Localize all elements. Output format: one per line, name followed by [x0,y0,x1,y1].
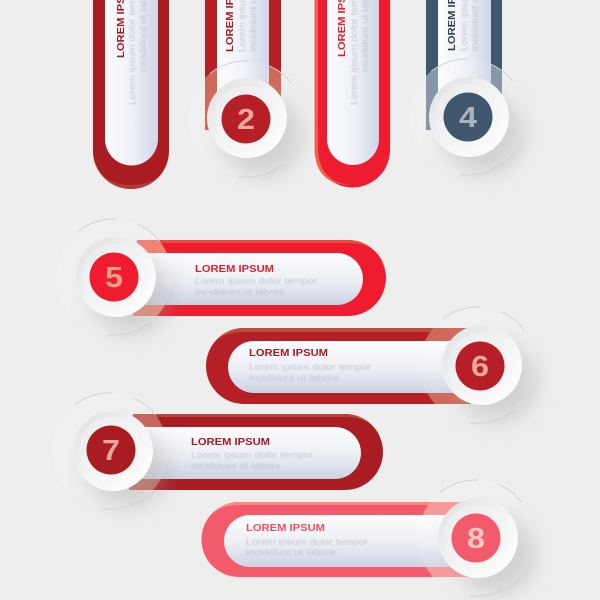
step 7 disc inner [79,417,145,483]
step 7 shadow [87,427,167,507]
step 5 body text [195,276,317,298]
panel: step 6 [206,307,536,423]
step 6 halo arcs [420,307,536,423]
step 5 shadow [90,253,170,333]
step 2 disc [207,78,287,158]
step 6 disc inner [448,333,514,399]
panel: step 4 [409,0,525,175]
step 2 inner card [217,0,269,120]
panel: step 5 [56,219,386,335]
panel: step 2 [188,0,304,177]
step 8 band [202,502,472,577]
step 8 heading: LOREM IPSUM [246,522,325,534]
step 4 body text [459,0,481,51]
step 8 shadow [454,514,534,594]
step 8 halo tint [422,505,468,577]
step 6 body text: incididunt ut labore [249,373,339,384]
step 6 heading: LOREM IPSUM [249,347,328,359]
step 6 band edge [206,328,472,366]
step 3 band [315,0,390,188]
step 8 halo arcs [418,480,534,596]
step 2 halo tint [205,66,281,130]
step 6 band [206,328,476,404]
step 5 halo arcs [56,219,172,335]
step 6 body text [249,362,371,384]
step 6 number: 6 [471,351,489,383]
step 6 number badge [456,342,504,390]
step 7 heading: LOREM IPSUM [191,436,270,448]
step 6 inner card [228,341,458,393]
step 8 body text [246,537,368,558]
step 8 disc [438,498,518,578]
step 8 inner card [224,515,454,567]
step 7 body text: incididunt ut labore [191,461,281,472]
step 5 inner card [140,253,363,305]
step 7 inner card [135,427,361,479]
step 6 disc [442,325,522,405]
panel: step 1 [93,0,169,189]
step 8 number: 8 [467,523,485,555]
step 4 number: 4 [459,102,477,134]
step 8 body text: Lorem ipsum dolor tempor [246,537,368,548]
step 4 inner card [438,0,491,120]
step 2 number: 2 [237,104,255,136]
step 2 halo arcs [188,61,304,177]
step 5 number badge [90,252,138,302]
step 4 number badge [444,92,492,142]
step 2 number badge [222,94,270,144]
step 1 body text [127,0,149,105]
step 4 disc [429,77,509,157]
step 5 body text: incididunt ut labore [195,287,285,298]
step 3 body text [349,0,371,105]
step 4 halo arcs [409,59,525,175]
step 1 band [93,0,169,189]
step 4 shadow [443,93,523,173]
step 5 disc inner [82,244,148,310]
step 1 band edge [93,151,169,189]
step 2 body text [237,0,259,52]
step 5 halo tint [133,240,167,316]
step 8 body text: incididunt ut labore [246,547,336,558]
step 8 band edge [202,502,468,540]
step 4 band [426,0,502,130]
step 4 disc inner [435,84,501,150]
step 3 band edge [314,0,353,185]
step 8 number badge [452,514,500,562]
step 3 inner card [327,0,379,165]
step 5 band [133,240,386,316]
step 2 disc inner [213,86,279,152]
step 7 body text: Lorem ipsum dolor tempor [191,450,313,461]
step 1 inner card [105,0,158,165]
step 5 band edge [137,240,386,278]
step 4 halo tint [426,64,502,130]
step 6 shadow [456,341,536,421]
step 7 body text [191,450,313,472]
step 8 disc inner [444,505,510,571]
step 7 band [129,414,383,490]
step 7 number badge [86,426,136,474]
step 7 band edge [133,414,383,452]
step 2 shadow [221,95,301,175]
step 7 disc [73,411,153,491]
step 7 number: 7 [102,435,120,467]
step 7 halo tint [129,414,163,490]
step 6 body text: Lorem ipsum dolor tempor [249,362,371,373]
step 5 heading: LOREM IPSUM [195,263,274,275]
step 5 body text: Lorem ipsum dolor tempor [195,276,317,287]
step 7 halo arcs [52,393,168,509]
step 5 disc [76,237,156,317]
panel: step 8 [202,480,534,596]
panel: step 7 [52,393,383,509]
panel: step 3 [314,0,390,188]
step 6 halo tint [425,328,472,404]
step 2 band [205,0,281,130]
step 5 number: 5 [105,262,123,294]
